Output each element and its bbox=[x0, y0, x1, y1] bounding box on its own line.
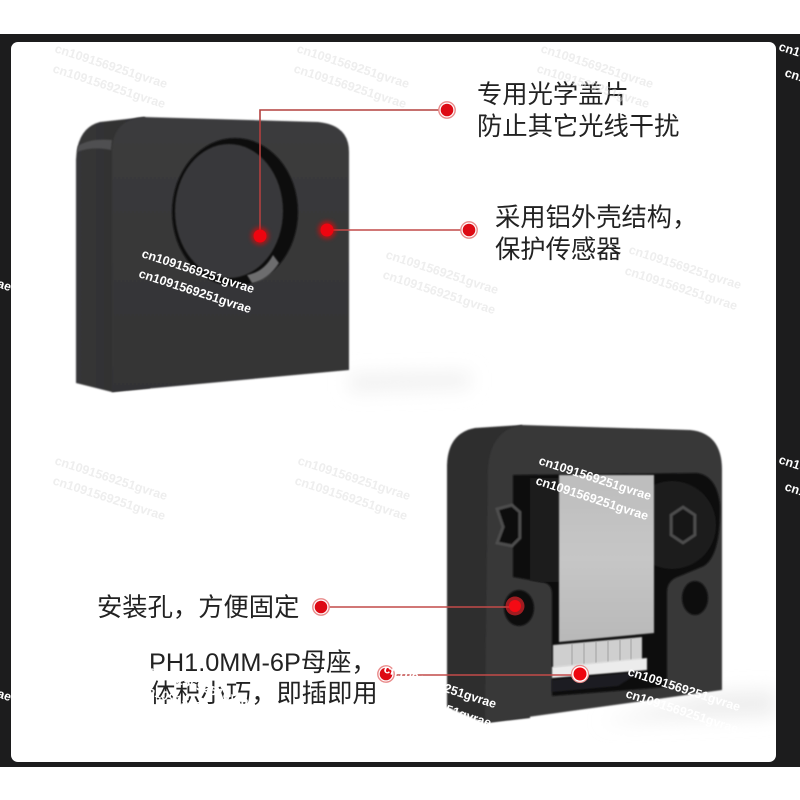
product: sensor front view bbox=[76, 117, 470, 392]
faint watermarks: cn1091569251gvrae bbox=[295, 42, 411, 91]
white watermarks: cn1091569251gvrae bbox=[141, 662, 257, 711]
connector base bbox=[552, 658, 647, 678]
white watermarks: cn1091569251gvrae bbox=[382, 662, 498, 711]
faint watermarks: cn1091569251gvrae bbox=[51, 62, 167, 111]
faint watermarks: cn1091569251gvrae bbox=[292, 62, 408, 111]
text: optical cover: 专用光学盖片 bbox=[477, 81, 629, 109]
device face bbox=[112, 117, 349, 392]
marker: shell outer bbox=[461, 222, 477, 238]
marker: connector outer bbox=[378, 666, 394, 682]
connector body bbox=[553, 637, 642, 668]
white watermarks: cn1091569251gvrae bbox=[140, 247, 256, 296]
optical cover bbox=[175, 144, 283, 278]
left hex screw bbox=[497, 505, 520, 546]
text: aluminium shell: 保护传感器 bbox=[495, 236, 622, 264]
cavity left wall bbox=[530, 478, 559, 582]
cavity bbox=[513, 473, 720, 696]
text: aluminium shell: 采用铝外壳结构， bbox=[495, 204, 697, 232]
side highlight bbox=[77, 140, 112, 152]
marker: mount hole outer bbox=[313, 599, 329, 615]
connector pins bbox=[572, 639, 631, 666]
white watermarks: cn1091569251gvrae bbox=[626, 665, 742, 714]
white watermarks: cn1091569251gvrae bbox=[137, 267, 253, 316]
text: connector bbox=[149, 649, 378, 708]
faint watermarks: cn1091569251gvrae bbox=[627, 243, 743, 292]
faint watermarks: cn1091569251gvrae bbox=[53, 42, 169, 91]
text: mount hole: 安装孔，方便固定 bbox=[97, 594, 299, 622]
faint watermarks: cn1091569251gvrae bbox=[623, 264, 739, 313]
white watermarks: cn1091569251gvrae bbox=[534, 474, 650, 523]
faint watermarks: cn1091569251gvrae bbox=[53, 454, 169, 503]
callout line: connector bbox=[388, 674, 580, 676]
rear lens circle bbox=[628, 481, 716, 569]
connector slot bbox=[552, 672, 640, 692]
rear floor shadow bbox=[656, 690, 774, 719]
callout line: aluminium shell bbox=[327, 229, 469, 231]
lens ring bbox=[172, 138, 298, 286]
text: optical cover: 防止其它光线干扰 bbox=[477, 113, 679, 141]
product: sensor rear view bbox=[447, 425, 776, 723]
rear side bbox=[447, 425, 530, 723]
faint watermarks bbox=[51, 42, 743, 523]
mount hole right bbox=[682, 581, 708, 615]
faint watermarks: cn1091569251gvrae bbox=[539, 42, 655, 91]
marker: shell inner bbox=[318, 221, 336, 239]
white watermarks: cn1091569251gvrae bbox=[377, 681, 493, 730]
marker: optical cover outer bbox=[439, 102, 455, 118]
faint watermarks: cn1091569251gvrae bbox=[535, 62, 651, 111]
white watermarks: cn1091569251gvrae bbox=[537, 454, 653, 503]
white watermarks: cn1091569251gvrae bbox=[139, 682, 255, 731]
rear face bbox=[485, 425, 722, 723]
faint watermarks: cn1091569251gvrae bbox=[51, 474, 167, 523]
text: connector: PH1.0MM-6P母座， bbox=[149, 649, 377, 677]
faint watermarks: cn1091569251gvrae bbox=[293, 474, 409, 523]
white watermarks: cn1091569251gvrae bbox=[624, 687, 740, 736]
faint watermarks: cn1091569251gvrae bbox=[381, 268, 497, 317]
marker: connector inner bbox=[572, 666, 588, 682]
floor shadow bbox=[349, 372, 470, 392]
ring highlight bbox=[247, 255, 279, 283]
mount hole left bbox=[504, 590, 534, 626]
marker: optical cover inner bbox=[251, 227, 269, 245]
callout line: optical cover bbox=[260, 110, 447, 236]
faint watermarks: cn1091569251gvrae bbox=[384, 248, 500, 297]
callout line: mount hole bbox=[320, 606, 515, 608]
faint watermarks: cn1091569251gvrae bbox=[296, 454, 412, 503]
text: optical cover bbox=[477, 81, 679, 141]
marker: mount hole inner bbox=[506, 596, 524, 616]
circuit board bbox=[559, 475, 654, 642]
device side bbox=[76, 117, 150, 392]
text: aluminium shell bbox=[495, 204, 697, 264]
text: connector: 体积小巧，即插即用 bbox=[150, 680, 378, 708]
right hex screw bbox=[671, 507, 695, 543]
